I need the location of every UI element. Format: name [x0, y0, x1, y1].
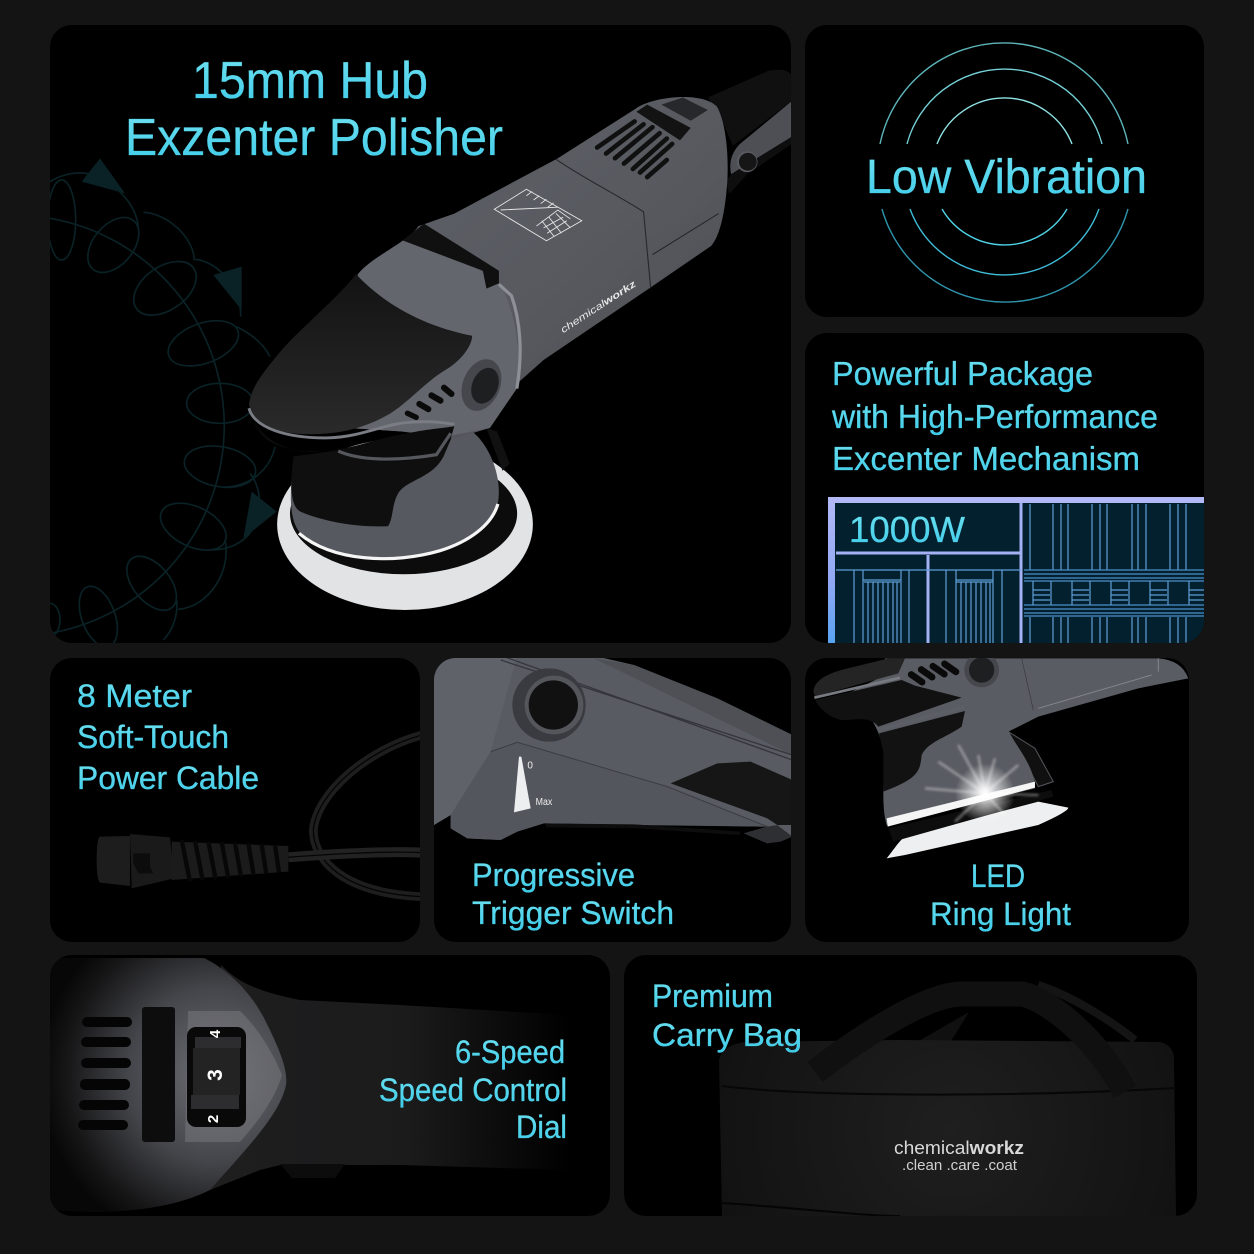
heading: 15mm Hub Exzenter Polisher: 15mm Hub: [192, 52, 428, 110]
carry bag illustration: chemical workz: [894, 1138, 1024, 1158]
carry bag illustration: .clean .care .coat: [902, 1157, 1018, 1174]
cable panel background: [50, 658, 420, 942]
text: 6-speed speed control dial: Dial: [516, 1109, 567, 1145]
trigger panel background: [434, 658, 791, 942]
main motor body: [347, 97, 728, 439]
text: powerful package: Excenter Mechanism: [832, 440, 1140, 477]
text: 6-speed speed control dial: Speed Control: [379, 1072, 567, 1108]
power panel background: [805, 333, 1204, 643]
text: 8 meter soft-touch power cable: 8 Meter: [77, 678, 192, 714]
1000W label: 1000W: [849, 509, 965, 550]
vibration panel background: [805, 25, 1204, 317]
handle and dial illustration: [50, 958, 570, 1212]
text: progressive trigger switch: [472, 857, 674, 931]
text: powerful package: Powerful Package: [832, 355, 1093, 392]
black grip skirt: [291, 431, 454, 526]
side vents: [404, 383, 456, 421]
text: 6-speed speed control dial: 6-Speed: [455, 1034, 565, 1070]
panel: LED ring light: [805, 653, 1189, 942]
text: LED ring light: [930, 858, 1071, 932]
panel: speed control dial: [50, 955, 610, 1216]
cable boot: [708, 70, 792, 146]
trigger body illustration: Max: [536, 797, 552, 808]
text: premium carry bag: Carry Bag: [652, 1017, 802, 1053]
skirt band: [338, 433, 451, 459]
dial numbers: 2: [205, 1115, 222, 1123]
cable illustration: [97, 735, 422, 897]
black rim: [290, 480, 518, 574]
white LED ring: [299, 504, 498, 559]
base bell: [291, 431, 499, 557]
text: powerful package: [832, 360, 1157, 470]
black top bumper: [402, 224, 499, 289]
dial numbers: [204, 1029, 227, 1123]
lock button: [462, 359, 502, 411]
text: premium carry bag: Premium: [652, 978, 773, 1014]
panel: carry bag: [624, 955, 1197, 1216]
body seam: [556, 159, 719, 289]
text: 8 meter soft-touch power cable: [78, 684, 258, 790]
concentric vibration arcs: [880, 43, 1128, 302]
grip silver edge: [249, 408, 454, 438]
silver trim line: [499, 284, 520, 389]
white backing pad: [277, 439, 533, 610]
brand text on body: chemicalworkz: [559, 279, 638, 336]
rear handle: [730, 101, 792, 174]
heading: 15mm Hub Exzenter Polisher: [128, 60, 502, 156]
dial numbers: 4: [207, 1029, 224, 1038]
polisher illustration: [249, 70, 792, 610]
text: 6-speed speed control dial: [379, 1034, 567, 1145]
LED panel background: [805, 658, 1189, 942]
side strap: [486, 428, 510, 471]
text: LED ring light: LED: [971, 858, 1025, 894]
panel: hero polisher: [40, 25, 792, 652]
body logo mark: [494, 189, 582, 241]
carry bag illustration: [719, 985, 1176, 1216]
blueprint diagram: [828, 497, 1204, 643]
bag panel background: [624, 955, 1197, 1216]
text: progressive trigger switch: Trigger Switch: [472, 895, 674, 931]
text: 8 meter soft-touch power cable: Soft-Touch: [77, 719, 229, 755]
panel: powerful package: [805, 333, 1204, 643]
heading: Low Vibration: Low Vibration: [866, 151, 1147, 204]
front housing highlight: [347, 226, 519, 435]
palm grip: [249, 274, 472, 434]
text: powerful package: with High-Performance: [831, 398, 1158, 435]
speed panel background: [50, 955, 610, 1216]
panel: low vibration: [805, 25, 1204, 317]
heading: 15mm Hub Exzenter Polisher: Exzenter Polisher: [125, 109, 503, 167]
panel: trigger switch: [434, 655, 792, 942]
text: premium carry bag: [652, 978, 802, 1053]
text: progressive trigger switch: Progressive: [472, 857, 635, 893]
switch block: [661, 97, 708, 121]
decorative orbit swirl: [40, 158, 277, 652]
dial numbers: 3: [204, 1069, 227, 1081]
text: LED ring light: Ring Light: [930, 896, 1071, 932]
panel: power cable: [50, 658, 422, 942]
hero panel background: [50, 25, 791, 643]
trigger body illustration: [434, 655, 792, 843]
lower black lip: [255, 424, 454, 452]
top vents: [597, 121, 672, 177]
trigger body illustration: 0: [527, 760, 533, 771]
polisher head with LED: [813, 653, 1188, 858]
text: 8 meter soft-touch power cable: Power Cable: [77, 760, 259, 796]
